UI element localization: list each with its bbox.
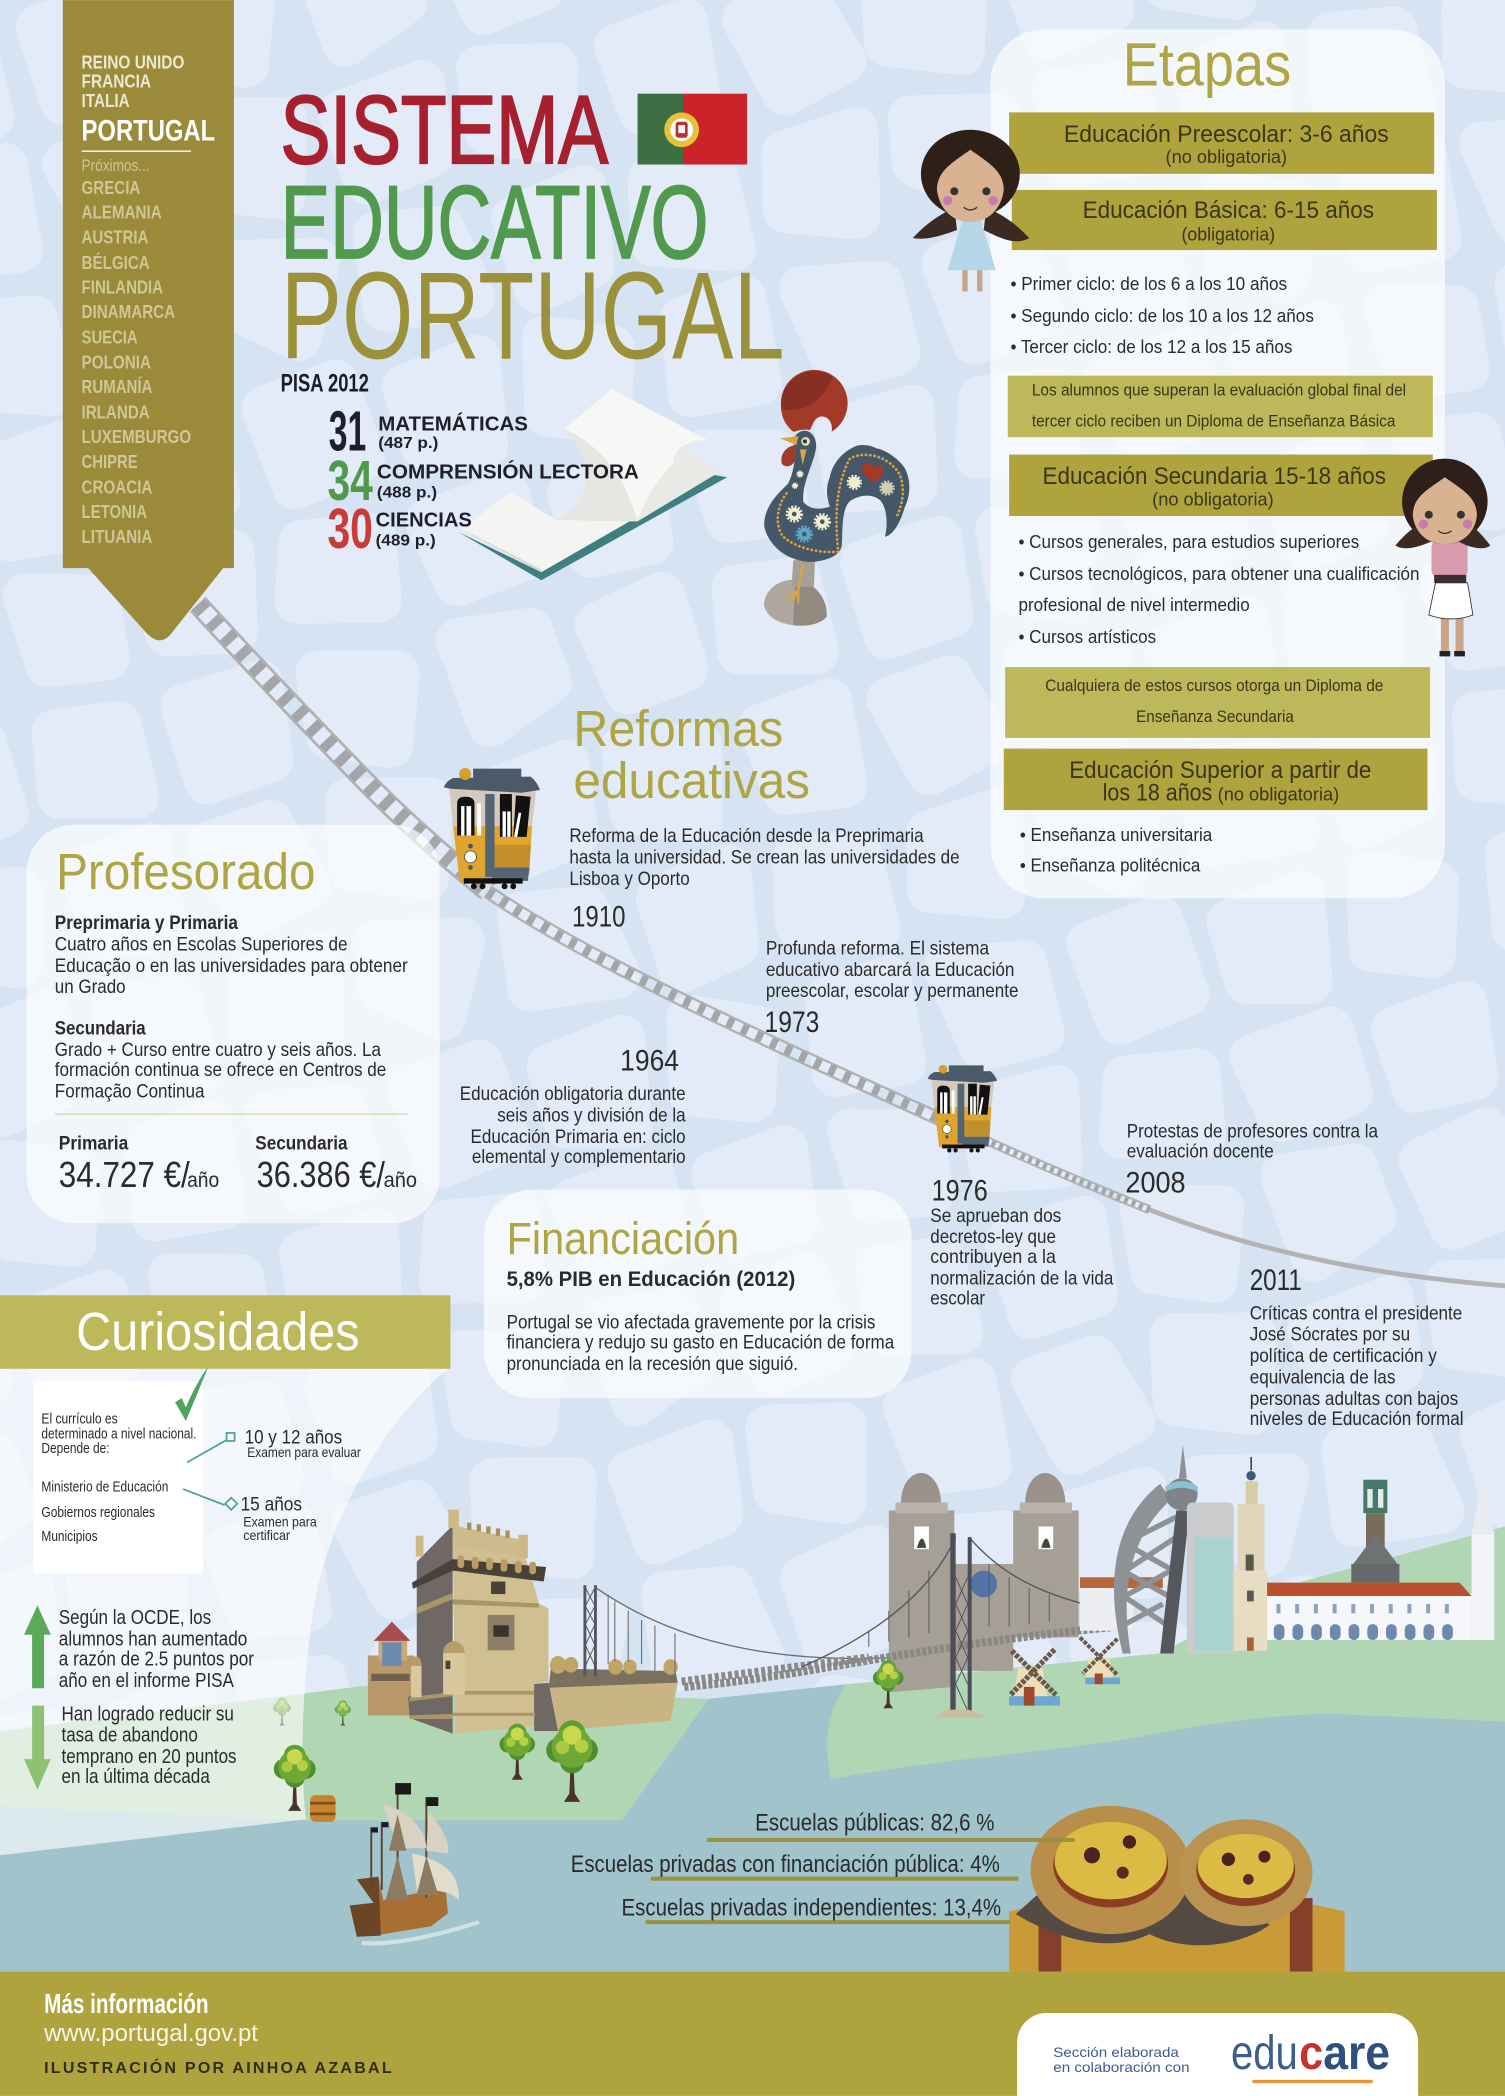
icon: girl in pink sweater	[1395, 459, 1490, 656]
box: currículo: Municipios	[41, 1529, 98, 1545]
timeline: 2011: personas adultas con bajos	[1250, 1388, 1458, 1410]
sidebar: country list: LUXEMBURGO	[82, 426, 191, 447]
icon: barrel	[310, 1795, 335, 1822]
list: cursos: • Cursos tecnológicos, para obtener una cualificación	[1018, 563, 1419, 584]
icon: tram large	[444, 768, 540, 889]
icon: belem tower	[368, 1510, 678, 1734]
callout: 15 años: certificar	[243, 1527, 290, 1543]
sidebar: country list: PORTUGAL	[82, 114, 215, 147]
timeline: 1910	[569, 825, 960, 933]
sidebar: country list: Próximos...	[82, 156, 150, 175]
bar: educación básica: (obligatoria)	[1182, 224, 1275, 245]
PISA 2012 results: (487 p.)	[378, 434, 438, 452]
logo panel: educare: c	[1299, 2026, 1323, 2080]
list: ciclos	[1010, 273, 1314, 357]
sidebar: country list: FRANCIA	[82, 71, 151, 92]
bar: educación superior: los 18 años	[1103, 780, 1212, 807]
box: diploma básica	[1008, 376, 1433, 437]
stats: school types	[571, 1810, 1075, 1924]
panel: etapas: Etapas	[1123, 31, 1291, 100]
timeline: 2011: 2011	[1250, 1264, 1302, 1297]
sidebar: country list: REINO UNIDO	[82, 51, 184, 72]
railway track	[191, 598, 1505, 1286]
timeline: 1964: elemental y complementario	[472, 1146, 686, 1168]
box: currículo: Ministerio de Educación	[41, 1480, 168, 1496]
timeline: 2011: niveles de Educación formal	[1250, 1408, 1464, 1430]
stats: school types: Escuelas privadas independientes: 13,4%	[622, 1894, 1001, 1921]
sidebar: country list: CHIPRE	[82, 451, 138, 472]
icon: jerónimos monastery	[1267, 1477, 1494, 1640]
panel: financiación: financiera y redujo su gasto en Educación de forma	[507, 1332, 894, 1354]
icon: porto cathedral	[889, 1473, 1079, 1692]
icon: up arrow	[24, 1605, 51, 1688]
sidebar: country list: LITUANIA	[82, 526, 153, 547]
box: diploma básica: tercer ciclo reciben un Diploma de Enseñanza Básica	[1032, 411, 1396, 430]
stats: school types: Escuelas privadas con financiación pública: 4%	[571, 1851, 1000, 1878]
panel: etapas	[990, 30, 1445, 898]
icon: Barcelos rooster	[764, 370, 909, 626]
landscape: water and land	[0, 1526, 1505, 1972]
panel: profesorado: Cuatro años en Escolas Superiores de	[55, 933, 348, 955]
list: enseñanza	[1020, 824, 1213, 876]
title: EDUCATIVO	[281, 165, 708, 281]
bar: educación secundaria	[1009, 455, 1433, 516]
fact: dropout reduction	[24, 1703, 237, 1790]
box: currículo	[33, 1381, 203, 1573]
timeline: 2011	[1250, 1264, 1464, 1430]
timeline: 1910: Lisboa y Oporto	[569, 868, 690, 890]
timeline: 1964: 1964	[620, 1045, 679, 1078]
bar: educación superior: (no obligatoria)	[1218, 784, 1339, 805]
panel: profesorado: Preprimaria y Primaria	[55, 912, 238, 934]
sidebar: country list: FINLANDIA	[82, 276, 163, 297]
fact: PISA increase: Según la OCDE, los	[59, 1607, 211, 1629]
timeline: 1964: Educación Primaria en: ciclo	[470, 1126, 686, 1148]
icon: Portuguese flag	[638, 94, 747, 165]
timeline: 1973: Profunda reforma. El sistema	[766, 937, 989, 959]
panel: financiación: 5,8% PIB en Educación (2012)	[507, 1267, 795, 1291]
footer	[0, 1972, 1505, 2096]
footer: www.portugal.gov.pt	[43, 2020, 258, 2047]
heading: reformas educativas	[573, 700, 810, 809]
bar: educación superior: Educación Superior a partir de	[1069, 757, 1371, 784]
box: diploma secundaria: Cualquiera de estos cursos otorga un Diploma de	[1045, 676, 1383, 695]
timeline: 2008: Protestas de profesores contra la	[1127, 1121, 1378, 1143]
timeline: 1910: 1910	[572, 900, 626, 933]
timeline: 2008	[1125, 1121, 1378, 1199]
timeline: 2011: Críticas contra el presidente	[1250, 1302, 1462, 1324]
sidebar: country list: SUECIA	[82, 327, 138, 348]
list: ciclos: • Tercer ciclo: de los 12 a los 15 años	[1010, 336, 1292, 357]
timeline: 1976: normalización de la vida	[930, 1268, 1114, 1290]
sidebar: country list: GRECIA	[82, 177, 141, 198]
bar: educación preescolar: Educación Preescolar: 3-6 años	[1064, 121, 1389, 148]
bar: educación básica: Educación Básica: 6-15 años	[1083, 197, 1374, 224]
callout: 10 y 12 años: 10 y 12 años	[245, 1427, 342, 1449]
panel: financiación	[484, 1190, 912, 1398]
fact: PISA increase: alumnos han aumentado	[59, 1628, 247, 1650]
bar: educación básica	[1012, 190, 1437, 250]
timeline: 1976: escolar	[930, 1288, 986, 1310]
list: cursos: • Cursos artísticos	[1018, 626, 1156, 647]
bar: educación secundaria: Educación Secundaria 15-18 años	[1043, 463, 1386, 490]
timeline: 1976: Se aprueban dos	[930, 1205, 1061, 1227]
list: cursos	[1018, 531, 1419, 647]
sidebar: country list: DINAMARCA	[82, 301, 175, 322]
sidebar: country list: AUSTRIA	[82, 226, 149, 247]
PISA 2012 results: COMPRENSIÓN LECTORA	[377, 460, 639, 484]
panel: profesorado: 36.386 €/	[257, 1154, 386, 1195]
box: currículo: determinado a nivel nacional.	[41, 1426, 196, 1442]
list: enseñanza: • Enseñanza politécnica	[1020, 855, 1201, 876]
sidebar: country list: ALEMANIA	[82, 202, 162, 223]
sidebar: country list: ITALIA	[82, 90, 130, 111]
logo panel: educare: edu	[1231, 2026, 1298, 2080]
callout: 15 años: Examen para	[243, 1513, 317, 1529]
timeline: 1976	[930, 1174, 1114, 1310]
timeline: 2011: equivalencia de las	[1250, 1366, 1395, 1388]
panel: profesorado: Primaria	[59, 1133, 129, 1155]
timeline: 1973: educativo abarcará la Educación	[766, 959, 1014, 981]
sidebar: country list: LETONIA	[82, 501, 147, 522]
icon: down arrow	[24, 1706, 51, 1790]
logo panel: educare: en colaboración con	[1053, 2059, 1190, 2075]
timeline: 1910: Reforma de la Educación desde la Preprimaria	[569, 825, 924, 847]
icon: open book	[458, 389, 727, 580]
sidebar: country list: IRLANDA	[82, 401, 150, 422]
panel: financiación: Portugal se vio afectada gravemente por la crisis	[507, 1312, 875, 1334]
icon: windmills	[1009, 1637, 1120, 1706]
sidebar: country list: CROACIA	[82, 476, 153, 497]
icon: ship	[350, 1783, 479, 1943]
list: enseñanza: • Enseñanza universitaria	[1020, 824, 1213, 845]
footer: ILUSTRACIÓN POR AINHOA AZABAL	[44, 2058, 392, 2077]
fact: PISA increase: a razón de 2.5 puntos por	[59, 1649, 254, 1671]
list: cursos: profesional de nivel intermedio	[1018, 594, 1250, 615]
PISA 2012 results: 31	[329, 400, 366, 463]
box: currículo: Gobiernos regionales	[41, 1505, 155, 1521]
bar: educación preescolar	[1009, 112, 1434, 174]
panel: profesorado: año	[187, 1168, 219, 1192]
list: cursos: • Cursos generales, para estudios superiores	[1018, 531, 1359, 552]
sidebar: country list: BÉLGICA	[82, 252, 150, 273]
title: PORTUGAL	[281, 246, 785, 385]
timeline: 1976: 1976	[932, 1174, 988, 1207]
sidebar: country list: RUMANÍA	[82, 376, 153, 397]
timeline: 1964: seis años y división de la	[497, 1105, 686, 1127]
PISA 2012 results: CIENCIAS	[376, 509, 472, 532]
sidebar: country list: POLONIA	[82, 351, 151, 372]
panel: profesorado: Educação o en las universidades para obtener	[55, 955, 408, 977]
panel: profesorado: Formação Continua	[55, 1080, 205, 1102]
panel: financiación: pronunciada en la recesión que siguió.	[507, 1353, 798, 1375]
timeline: 2011: política de certificación y	[1250, 1345, 1437, 1367]
list: ciclos: • Primer ciclo: de los 6 a los 10 años	[1010, 273, 1287, 294]
PISA 2012 results: PISA 2012	[281, 370, 369, 398]
footer: Más información	[44, 1988, 209, 2019]
PISA 2012 results: MATEMÁTICAS	[378, 412, 528, 435]
callout: 10 y 12 años	[187, 1427, 361, 1462]
stats: school types: Escuelas públicas: 82,6 %	[755, 1810, 994, 1837]
PISA 2012 results: 30	[327, 497, 373, 560]
heading: reformas educativas: Reformas	[573, 700, 783, 757]
panel: profesorado: un Grado	[55, 976, 126, 998]
fact: dropout reduction: en la última década	[61, 1766, 211, 1788]
curiosidades heading: Curiosidades	[76, 1303, 360, 1362]
PISA 2012 results: (489 p.)	[376, 531, 436, 549]
icon: check mark	[175, 1366, 209, 1421]
icon: pastéis de nata on box	[1009, 1806, 1345, 1972]
box: diploma secundaria	[1005, 667, 1430, 738]
timeline: 1976: contribuyen a la	[930, 1246, 1056, 1268]
callout: 15 años: 15 años	[241, 1493, 302, 1515]
bar: educación superior	[1004, 749, 1427, 810]
bar: educación secundaria: (no obligatoria)	[1152, 488, 1274, 509]
curiosidades heading	[0, 1295, 450, 1369]
fact: dropout reduction: temprano en 20 puntos	[61, 1746, 237, 1768]
timeline: 1973	[765, 937, 1018, 1039]
panel: profesorado: Secundaria	[55, 1018, 146, 1040]
panel: profesorado	[27, 825, 440, 1223]
icon: lisbon bridge	[596, 1588, 896, 1682]
panel: profesorado: formación continua se ofrece en Centros de	[55, 1059, 386, 1081]
curiosidades backdrop	[0, 1367, 450, 1855]
sidebar: country list	[63, 0, 234, 640]
fact: dropout reduction: tasa de abandono	[61, 1725, 198, 1747]
panel: profesorado: Grado + Curso entre cuatro y seis años. La	[55, 1039, 381, 1061]
icon: clérigos tower	[1234, 1457, 1267, 1651]
box: diploma básica: Los alumnos que superan la evaluación global final del	[1032, 381, 1406, 400]
logo panel: educare	[1017, 2013, 1418, 2096]
callout: 15 años	[183, 1489, 317, 1543]
callout: 10 y 12 años: Examen para evaluar	[247, 1444, 361, 1460]
fact: PISA increase	[24, 1605, 254, 1692]
timeline: 1976: decretos-ley que	[930, 1226, 1056, 1248]
timeline: 1910: hasta la universidad. Se crean las universidades de	[569, 847, 960, 869]
timeline: 1964: Educación obligatoria durante	[460, 1083, 686, 1105]
icon: vasco da gama tower	[1080, 1445, 1234, 1653]
list: ciclos: • Segundo ciclo: de los 10 a los 12 años	[1010, 305, 1314, 326]
PISA 2012 results	[281, 370, 639, 560]
logo panel: educare: are	[1323, 2026, 1390, 2080]
box: diploma secundaria: Enseñanza Secundaria	[1136, 707, 1294, 726]
logo panel: educare: Sección elaborada	[1053, 2044, 1179, 2060]
icon: trees	[273, 1660, 903, 1811]
panel: profesorado: año	[384, 1168, 417, 1192]
fact: PISA increase: año en el informe PISA	[59, 1670, 234, 1692]
icon: tram small	[928, 1065, 997, 1152]
timeline: 2011: José Sócrates por su	[1250, 1324, 1410, 1346]
fact: dropout reduction: Han logrado reducir su	[61, 1703, 234, 1725]
timeline: 1973: preescolar, escolar y permanente	[766, 980, 1018, 1002]
box: currículo: Depende de:	[41, 1441, 110, 1457]
PISA 2012 results: (488 p.)	[377, 483, 437, 501]
panel: profesorado: 34.727 €/	[59, 1154, 191, 1195]
heading: reformas educativas: educativas	[573, 752, 810, 809]
timeline: 2008: 2008	[1125, 1166, 1186, 1199]
icon: girl in blue dress	[913, 130, 1029, 291]
PISA 2012 results: 34	[327, 449, 373, 512]
timeline: 2008: evaluación docente	[1127, 1141, 1274, 1163]
panel: profesorado: Secundaria	[255, 1133, 348, 1155]
icon: porto bridge	[684, 1533, 1116, 1718]
box: currículo: El currículo es	[41, 1412, 118, 1428]
panel: financiación: Financiación	[507, 1213, 739, 1264]
title: SISTEMA	[281, 77, 608, 184]
timeline: 1964	[460, 1045, 686, 1168]
timeline: 1973: 1973	[765, 1006, 819, 1039]
title	[281, 77, 785, 385]
panel: profesorado: Profesorado	[56, 843, 315, 900]
bar: educación preescolar: (no obligatoria)	[1166, 146, 1287, 167]
